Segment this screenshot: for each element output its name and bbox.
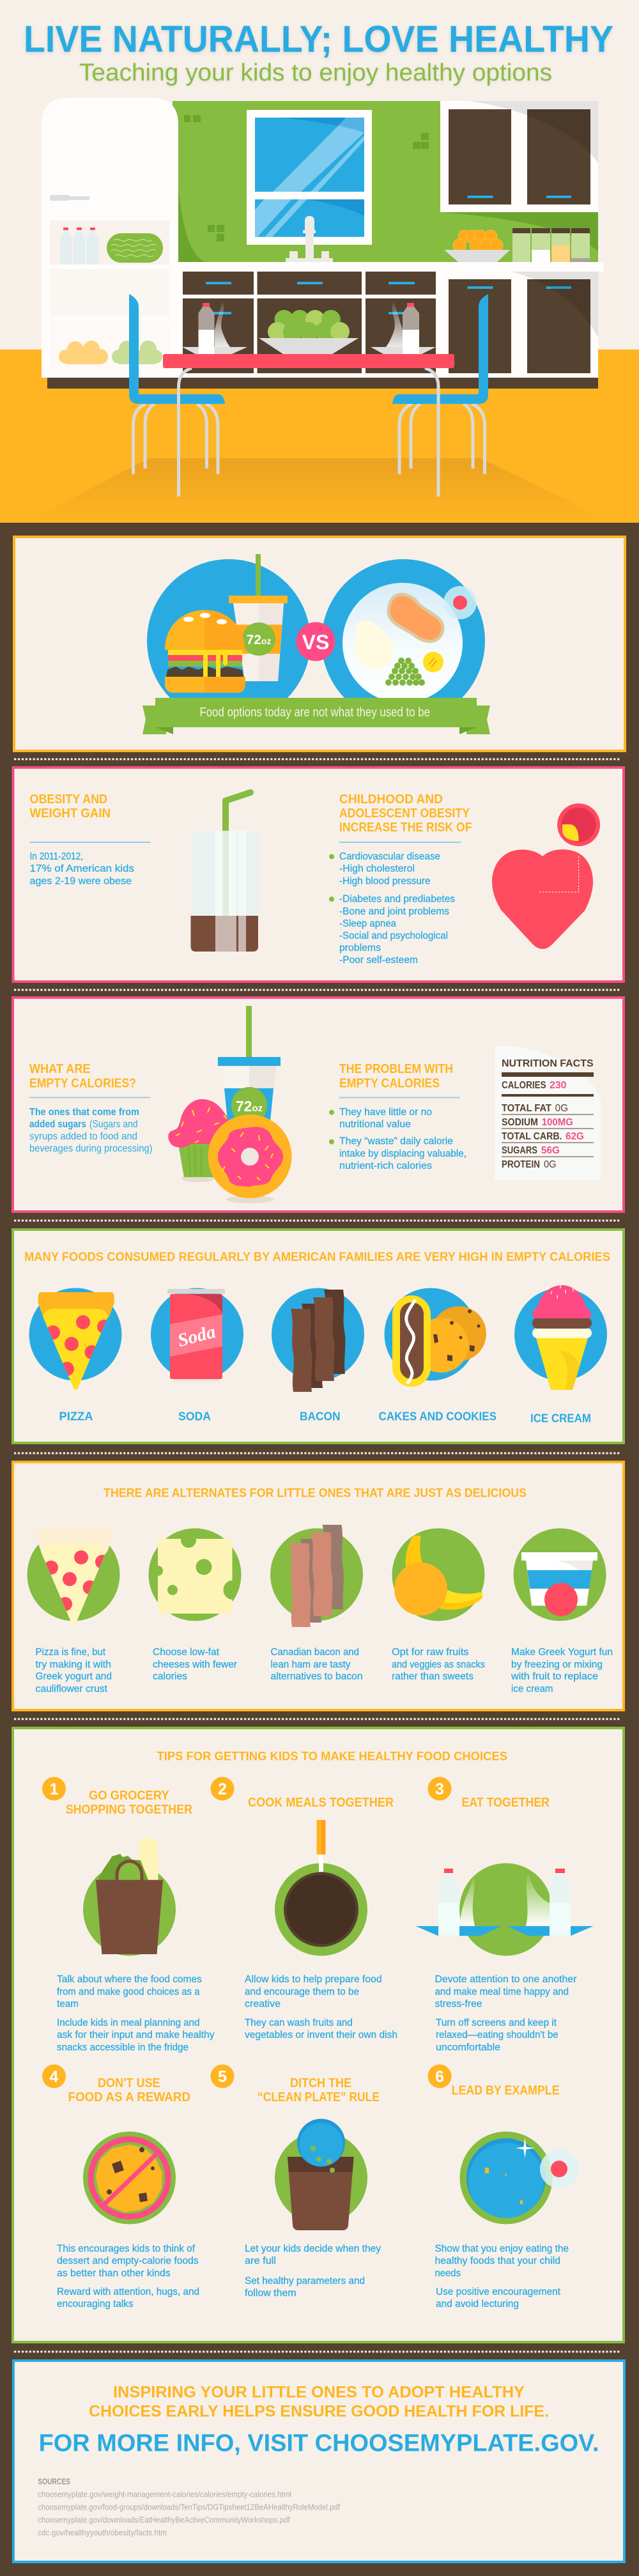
ribbon banner [142,698,490,734]
tip 3 text: uncomfortable [436,2042,500,2053]
heading: childhood obesity [339,792,472,835]
alternate text: pizza: Greek yogurt and [36,1671,112,1682]
sources: choosemyplate.gov/downloads/EatHealthyBeActiveCommunityWorkshops.pdf [38,2515,290,2525]
tip 3 number: 3 [435,1780,444,1798]
tip 2 heading: COOK MEALS TOGETHER [248,1796,394,1810]
tip 1 text [57,1974,215,2053]
tip 1 heading [66,1789,192,1817]
sources: cdc.gov/healthyyouth/obesity/facts.htm [38,2528,167,2538]
tip 6 text [435,2244,569,2310]
tip 6 text: needs [435,2268,461,2279]
panel: foods high in empty calories [13,1230,624,1443]
definition text: The ones that come from [29,1107,139,1118]
icon: soda cup [218,1006,281,1134]
table [163,354,454,497]
risk list: -Social and psychological [339,930,448,941]
alternate text: fruit [392,1647,485,1682]
problem list: nutrient-rich calories [339,1161,432,1171]
nutrition facts label: CALORIES [502,1080,546,1091]
alternate text: pizza [36,1647,112,1695]
nutrition facts label: 230 [550,1080,567,1091]
heading: obesity: WEIGHT GAIN [29,806,111,821]
dotted divider [14,1219,620,1222]
risk list: -High blood pressure [339,875,431,887]
fruit bowl and jars on counter [444,228,590,262]
tip 3 text: Devote attention to one another [435,1974,577,1985]
dotted divider [14,1718,620,1720]
tip 1 number [42,1777,66,1801]
tip 3 text: relaxed—eating shouldn't be [436,2030,558,2040]
risk list [329,851,455,966]
tip 4 number [42,2064,66,2088]
green wall [173,101,598,262]
tip 5 text: are full [245,2256,276,2266]
definition text [29,1107,152,1154]
tip 2 text: Allow kids to help prepare food [245,1974,382,1985]
icon: grocery bag [83,1838,176,1955]
tip 1 text: ask for their input and make healthy [57,2030,215,2040]
nutrition facts label: 0G [555,1103,568,1114]
heading: problem [339,1062,453,1091]
icon: white plate with food [343,583,477,703]
panel: healthy alternates [13,1462,624,1710]
tip 2 text [245,1974,397,2040]
heading: childhood obesity: CHILDHOOD AND [339,792,443,806]
icon: heart with artery [492,803,600,949]
risk list: -Sleep apnea [339,918,396,929]
heading: alternates: THERE ARE ALTERNATES FOR LITTLE ONES THAT ARE JUST AS DELICIOUS [104,1487,527,1500]
tip 5 number [211,2064,234,2088]
alternate text: yogurt: with fruit to replace [511,1671,598,1682]
risk list: -Bone and joint problems [339,906,449,917]
closing statement: CHOICES EARLY HELPS ENSURE GOOD HEALTH FOR LIFE. [89,2403,549,2421]
left chair [129,294,225,474]
tip 4 heading: FOOD AS A REWARD [68,2090,190,2104]
obesity statistic: 17% of American kids [29,863,134,874]
alternate text: cheese [153,1647,238,1682]
tip 6 number: 6 [435,2068,444,2086]
alternate text: pizza: cauliflower crust [36,1684,108,1695]
sources: SOURCES [38,2477,70,2487]
definition text: beverages during processing) [29,1143,152,1154]
problem list [329,1107,466,1171]
alternate text: yogurt: by freezing or mixing [511,1659,603,1670]
tip 4 number: 4 [50,2068,59,2086]
icon: soda glass [190,792,258,952]
panel: obesity and weight gain [13,767,624,982]
problem list: nutritional value [339,1119,411,1130]
problem list: They “waste” daily calorie [339,1136,453,1147]
tip 3 number [428,1777,451,1801]
window [247,110,372,245]
alternate text: yogurt [511,1647,613,1695]
food labels: ICE CREAM [530,1412,591,1425]
nutrition facts label: 100MG [542,1117,573,1128]
tip 1 text: from and make good choices as a [57,1987,200,1998]
fridge lettuce [107,233,163,263]
alternate text: bacon: alternatives to bacon [271,1671,363,1682]
panel: empty calories [13,998,624,1212]
sources: choosemyplate.gov/food-groups/downloads/TenTips/DGTipsheet12BeAHealthyRoleModel.pdf [38,2503,340,2512]
heading: problem: EMPTY CALORIES [339,1077,440,1091]
food labels: PIZZA [59,1410,93,1423]
tip 1 text: Talk about where the food comes [57,1974,202,1985]
tip 5 heading: “CLEAN PLATE” RULE [258,2090,380,2104]
subtitle: Teaching your kids to enjoy healthy options [79,59,552,86]
icon: healthy plate circle [321,559,485,723]
nutrition facts label: 62G [566,1131,584,1142]
heading: tips: TIPS FOR GETTING KIDS TO MAKE HEALTHY FOOD CHOICES [157,1750,507,1764]
heading: problem: THE PROBLEM WITH [339,1062,453,1076]
tip 5 heading: DITCH THE [290,2076,351,2090]
tip 4 heading [68,2076,190,2104]
nutrition facts label: TOTAL CARB. [502,1131,562,1142]
icon: fast food circle [147,559,311,723]
alternate text: fruit: rather than sweets [392,1671,473,1682]
tip 3 text: Turn off screens and keep it [436,2017,557,2028]
heading: many foods: MANY FOODS CONSUMED REGULARLY BY AMERICAN FAMILIES ARE VERY HIGH IN EMPTY CALORIES [24,1251,610,1264]
risk list: -Diabetes and prediabetes [339,893,455,905]
alternate text: cheese: calories [153,1671,187,1682]
icon: no cookie [83,2132,176,2224]
call to action: FOR MORE INFO, VISIT CHOOSEMYPLATE.GOV. [39,2430,599,2457]
closing statement: INSPIRING YOUR LITTLE ONES TO ADOPT HEALTHY [113,2384,525,2402]
upper cabinets [440,101,598,212]
definition text: syrups added to food and [29,1131,137,1142]
icon: pizza [29,1288,121,1389]
tip 3 text [435,1974,577,2053]
tip 2 text: and encourage them to be [245,1987,359,1998]
alternate text: bacon [271,1647,363,1682]
vs badge: VS [302,631,329,654]
nutrition facts label: 56G [541,1145,560,1156]
sources [38,2477,340,2538]
table setting: milk, plates and apples [182,300,436,354]
tip 4 heading: DON'T USE [98,2076,160,2090]
icon: cupcake [168,1099,238,1182]
alternate text: pizza: try making it with [36,1659,111,1670]
definition text: (Sugars and [89,1119,138,1130]
nutrition facts label: SUGARS [502,1145,537,1156]
header panel [0,0,639,350]
heading: what are empty calories: WHAT ARE [29,1062,91,1076]
risk list: -Poor self-esteem [339,955,418,966]
fridge water bottles [60,228,98,265]
nutrition facts label [495,1046,601,1180]
tip 5 heading [258,2076,380,2104]
ribbon banner: Food options today are not what they used to be [199,706,430,720]
tip 4 text [57,2244,199,2310]
icon: soda cup: 72oz [236,1098,263,1114]
tip 3 text: and make meal time happy and [435,1987,569,1998]
risk list: -High cholesterol [339,863,415,874]
tip 1 heading: SHOPPING TOGETHER [66,1803,192,1817]
obesity statistic [29,851,134,887]
tip 2 text: vegetables or invent their own dish [245,2030,397,2040]
tip 6 text: and avoid lecturing [436,2299,519,2310]
alternate text: fruit: and veggies as snacks [392,1659,485,1670]
icon: swiss cheese [148,1529,242,1621]
alternate text: fruit: Opt for raw fruits [392,1647,469,1658]
icon: eating together table setting [415,1863,594,1955]
icon: eclair and cookies [385,1288,486,1387]
tip 1 text: team [57,1999,79,2010]
tip 3 text: stress-free [435,1999,482,2010]
nutrition facts label: NUTRITION FACTS [502,1058,594,1069]
icon: canadian bacon [270,1525,363,1627]
heading: childhood obesity: ADOLESCENT OBESITY [339,806,470,821]
tip 2 text: creative [245,1999,281,2010]
food labels: CAKES AND COOKIES [378,1410,497,1423]
tip 4 text: dessert and empty-calorie foods [57,2256,199,2266]
nutrition facts label: TOTAL FAT [502,1103,551,1114]
icon: frozen yogurt [514,1529,606,1621]
faucet [286,216,333,262]
divider right [339,1097,460,1098]
tip 5 text: follow them [245,2288,296,2299]
icon: frying pan [275,1820,367,1955]
heading: childhood obesity: INCREASE THE RISK OF [339,821,472,835]
tip 6 text: Use positive encouragement [436,2287,561,2297]
tip 4 text: Reward with attention, hugs, and [57,2287,199,2297]
vs badge [296,622,335,661]
tip 3 heading: EAT TOGETHER [462,1796,550,1810]
icon: banana and orange [392,1529,484,1621]
icon: ice cream cone [514,1285,607,1390]
alternate text: bacon: Canadian bacon and [271,1647,359,1658]
icon: plate with cup, lead by example [460,2132,578,2224]
tip 4 text: encouraging talks [57,2299,133,2310]
icon: burger [165,610,245,693]
panel: closing call to action [13,2361,624,2562]
icon: large drink [229,554,288,681]
tip 4 text: This encourages kids to think of [57,2244,196,2255]
alternate text: bacon: lean ham are tasty [271,1659,350,1670]
alternate text: cheese: Choose low-fat [153,1647,220,1658]
tip 6 text: Show that you enjoy eating the [435,2244,569,2255]
tip 1 text: Include kids in meal planning and [57,2017,199,2028]
tip 4 text: as better than other kinds [57,2268,171,2279]
tip 1 heading: GO GROCERY [89,1789,169,1803]
icon: large drink: 72oz [247,633,271,647]
tip 1 number: 1 [50,1780,59,1798]
nutrition facts label: 0G [544,1159,556,1170]
obesity statistic: ages 2-19 were obese [29,875,132,887]
dotted divider [14,1452,620,1454]
obesity statistic: In 2011-2012, [29,851,83,862]
risk list: problems [339,943,381,953]
tip 2 number [211,1777,234,1801]
nutrition facts label: PROTEIN [502,1159,540,1170]
heading: obesity [29,792,111,821]
alternate text: yogurt: ice cream [511,1684,553,1695]
icon: donut [208,1114,291,1203]
sources: choosemyplate.gov/weight-management-calories/calories/empty-calories.html [38,2490,291,2499]
icon: soda can: Soda [176,1322,218,1351]
heading: obesity: OBESITY AND [29,792,107,806]
tip 6 text: healthy foods that your child [435,2256,560,2266]
alternate text: pizza: Pizza is fine, but [36,1647,106,1658]
dotted divider [14,2350,620,2353]
tip 5 text [245,2244,381,2299]
section frame: food options comparison [14,537,625,751]
dotted divider [14,989,620,991]
divider left [29,1097,150,1098]
kitchen illustration [0,98,639,523]
lower cabinets [47,262,603,389]
tip 6 heading: LEAD BY EXAMPLE [452,2083,560,2097]
risk list: Cardiovascular disease [339,851,440,862]
risk divider [339,842,461,843]
panel: tips [13,1728,624,2342]
fridge produce [59,341,162,364]
tip 5 text: Let your kids decide when they [245,2244,381,2255]
alternate text: yogurt: Make Greek Yogurt fun [511,1647,613,1658]
obesity divider [29,842,151,843]
tip 5 text: Set healthy parameters and [245,2276,365,2287]
title: LIVE NATURALLY; LOVE HEALTHY [24,19,613,60]
dotted divider [14,758,620,760]
food labels [59,1410,591,1425]
floor [0,350,639,523]
alternate text: cheese: cheeses with fewer [153,1659,238,1670]
right chair [392,294,488,474]
tip 1 text: snacks accessible in the fridge [57,2042,189,2053]
tip 5 number: 5 [218,2068,227,2086]
tip 2 text: They can wash fruits and [245,2017,353,2028]
problem list: intake by displacing valuable, [339,1148,466,1159]
icon: pale pizza [27,1527,120,1624]
icon: bacon [272,1288,364,1392]
food labels: SODA [178,1410,211,1423]
definition text: added sugars [29,1119,86,1130]
food labels: BACON [300,1410,340,1423]
icon: soda can [151,1288,243,1382]
nutrition facts label: SODIUM [502,1117,538,1128]
closing statement [89,2384,549,2421]
tip 2 number: 2 [218,1780,227,1798]
refrigerator [42,98,178,378]
icon: clean plate cup and bowl [275,2119,367,2230]
problem list: They have little or no [339,1107,432,1118]
heading: what are empty calories: EMPTY CALORIES? [29,1077,136,1091]
heading: what are empty calories [29,1062,136,1091]
tip 6 number [428,2064,451,2088]
